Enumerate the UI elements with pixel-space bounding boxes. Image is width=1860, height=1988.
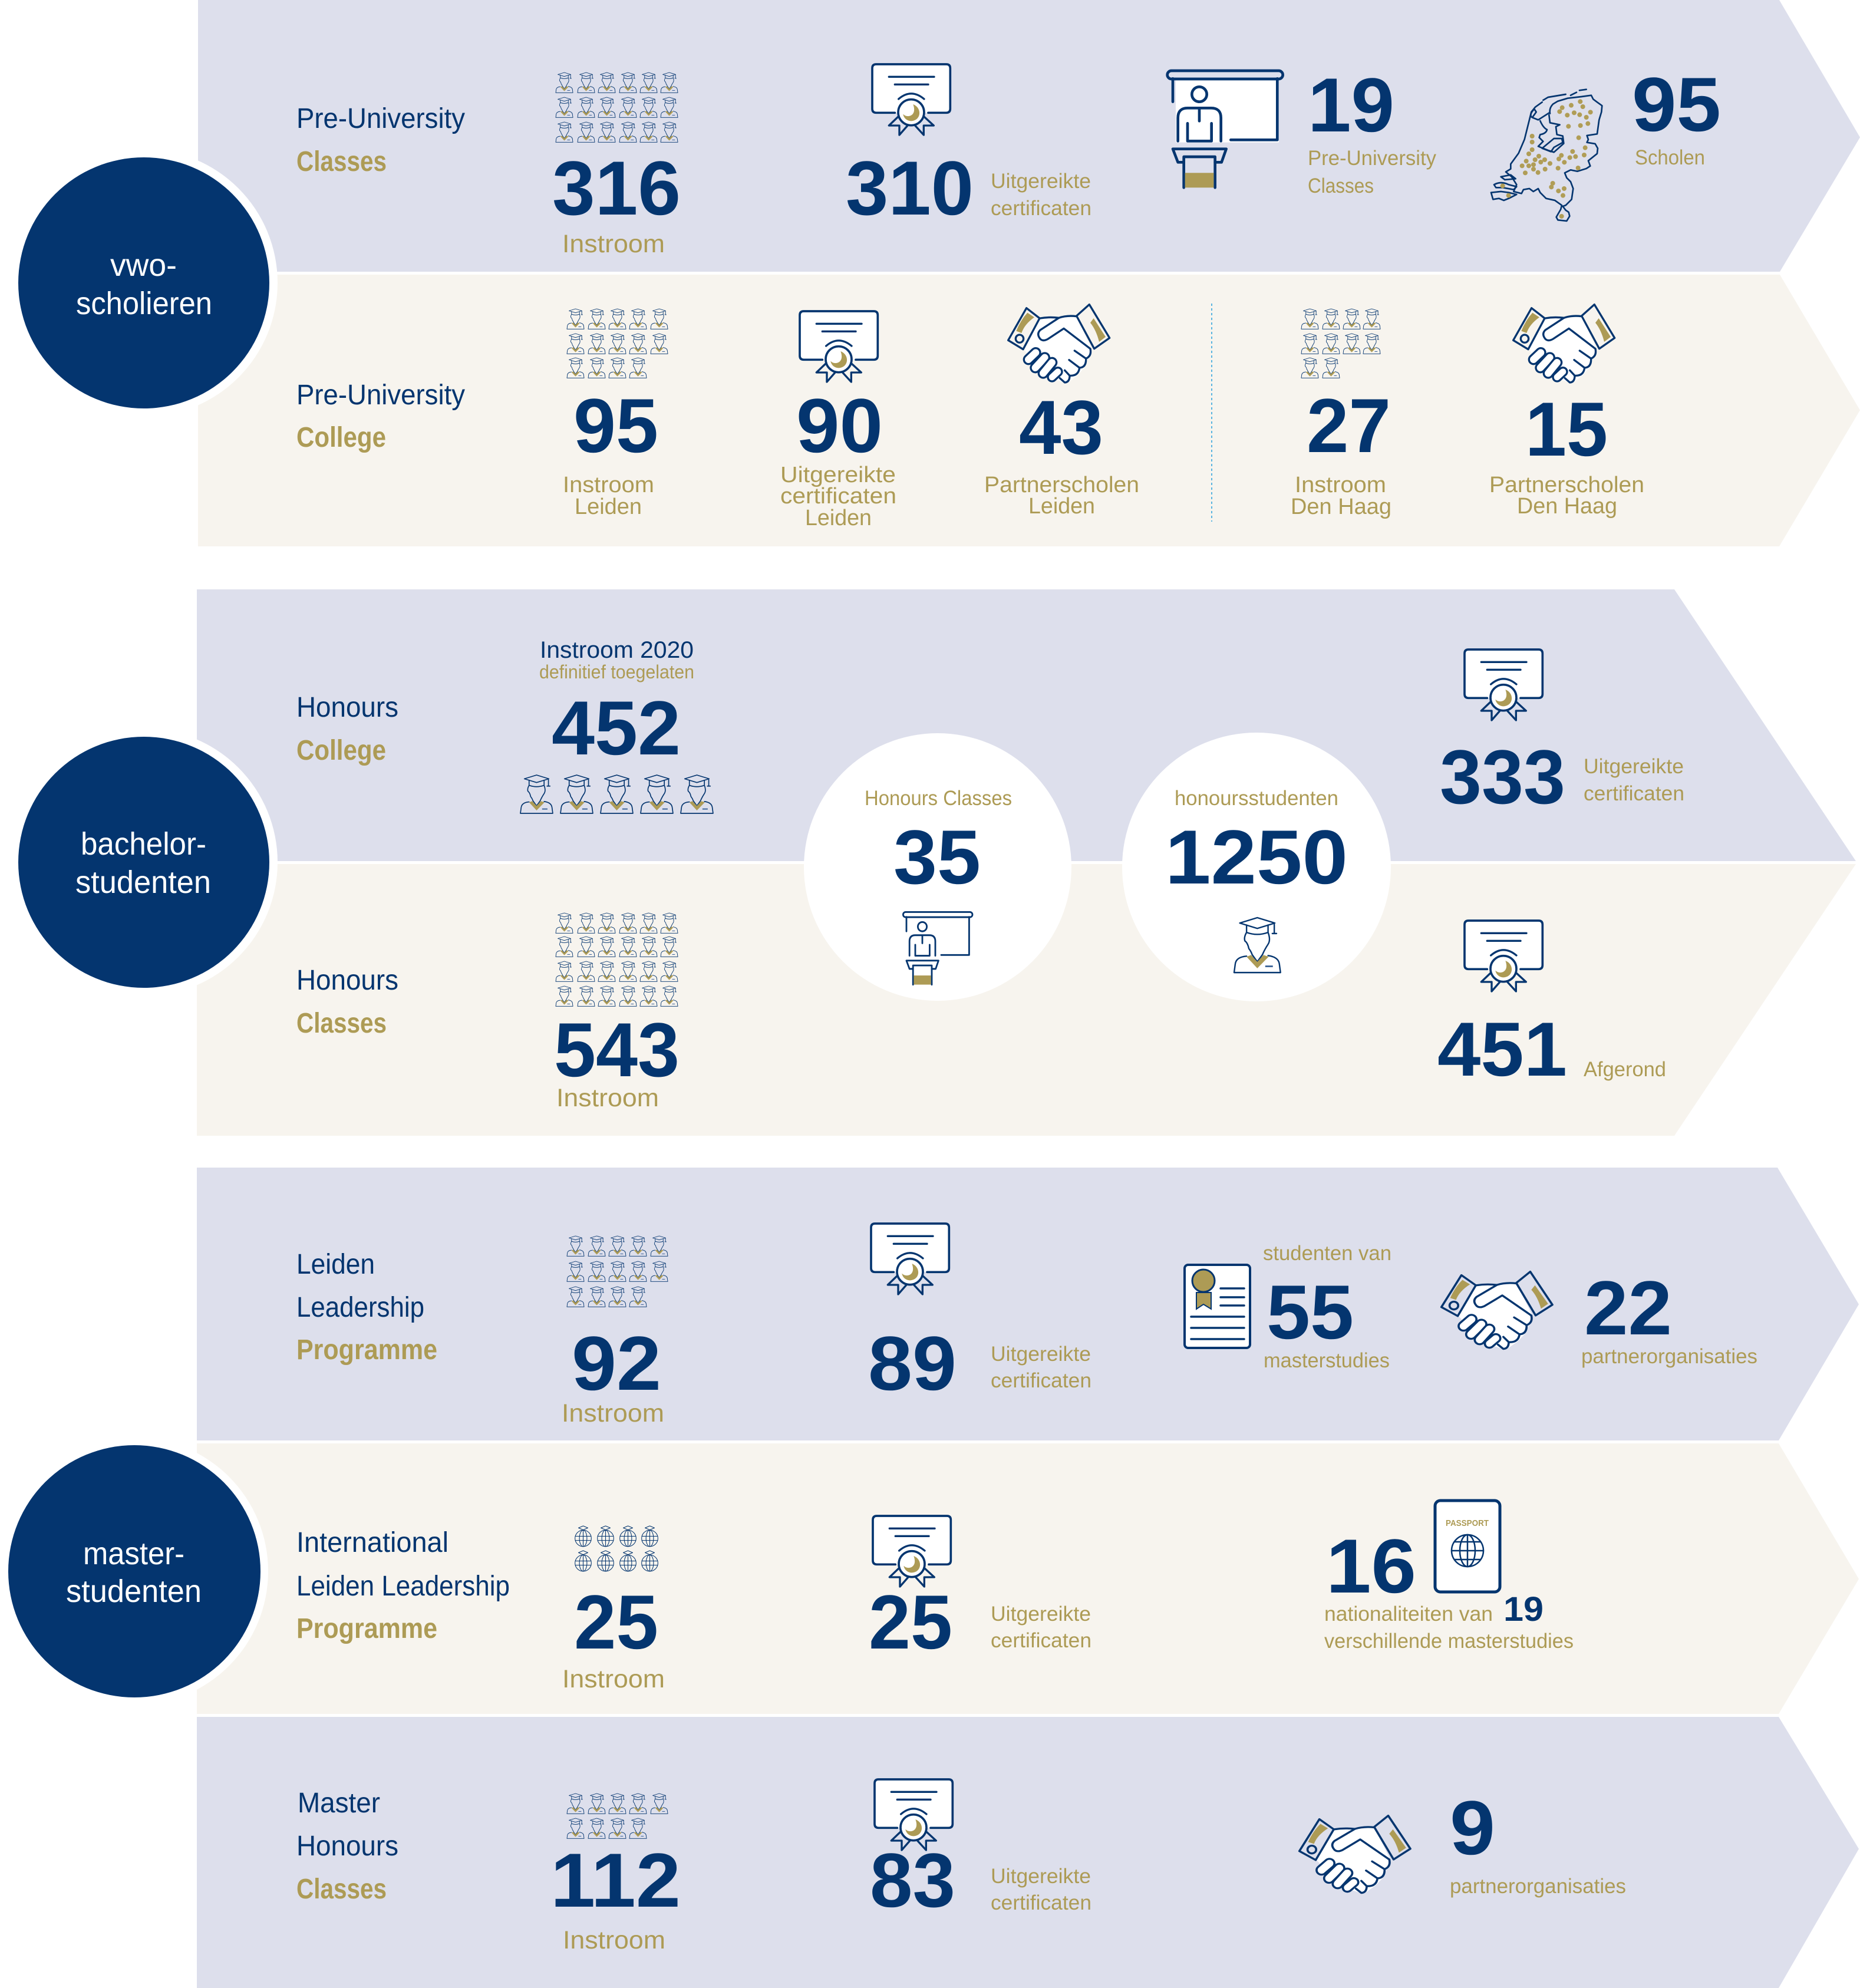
stat: 9 partnerorganisaties: 9 — [1450, 1785, 1495, 1871]
student icons: 316 — [556, 72, 678, 142]
stat: 16 nationaliteiten van 19 verschillende masterstudies: verschillende masterstudies — [1324, 1630, 1574, 1653]
stat: 19 Pre-University Classes: 19 — [1308, 62, 1394, 148]
circle: vwo-scholieren — [10, 149, 278, 417]
callout: 1250 honoursstudenten — [1122, 733, 1391, 1001]
stat: 16 nationaliteiten van 19 verschillende masterstudies: 16 — [1326, 1523, 1416, 1609]
stat: 89 certificaten: 89 — [868, 1320, 957, 1406]
stat: 316 Instroom: Instroom — [562, 230, 665, 258]
heading: Pre-University Classes — [296, 103, 465, 177]
stat: 92 Instroom: Instroom — [562, 1399, 664, 1427]
stat: 89 certificaten: certificaten — [991, 1369, 1091, 1392]
stat: Instroom 2020 452: 452 — [552, 685, 681, 771]
icon: certificate — [1465, 921, 1542, 991]
callout: 35 Honours Classes: Honours Classes — [865, 787, 1012, 810]
student icons: 112 — [567, 1794, 668, 1838]
stat: 90 certificaten Leiden: Leiden — [805, 506, 872, 530]
stat: 92 Instroom — [562, 1320, 664, 1427]
icon: certificate — [873, 1516, 951, 1587]
stat: 16 nationaliteiten van 19 verschillende masterstudies: 19 — [1503, 1590, 1544, 1628]
panel: Pre-University College — [198, 275, 1860, 546]
panel: Honours Classes — [197, 864, 1856, 1136]
stat: 95 Instroom Leiden: Instroom — [563, 473, 654, 497]
heading: Honours Classes: Classes — [296, 1008, 387, 1039]
stat: 90 certificaten Leiden — [780, 383, 896, 530]
stat: Instroom 2020 452: definitief toegelaten — [539, 661, 694, 683]
heading: Honours Classes — [296, 965, 398, 1039]
stat: 22 partnerorganisaties: 22 — [1584, 1265, 1672, 1351]
stat: 89 certificaten — [868, 1320, 1091, 1406]
stat: 25 certificaten — [869, 1579, 1091, 1665]
stat: 22 partnerorganisaties: partnerorganisaties — [1581, 1345, 1757, 1368]
stat: 451 Afgerond: 451 — [1437, 1006, 1567, 1092]
student icons: 92 — [567, 1236, 668, 1307]
stat: 25 Instroom: Instroom — [562, 1665, 665, 1693]
heading: Honours College: Honours — [296, 692, 398, 723]
callout: 1250 honoursstudenten: honoursstudenten — [1175, 787, 1338, 810]
stat: studenten van 55 masterstudies: masterstudies — [1264, 1349, 1390, 1372]
circle: masterstudenten: studenten — [66, 1574, 202, 1609]
heading: Honours Classes: Honours — [296, 965, 398, 996]
stat: 25 Instroom: 25 — [574, 1579, 658, 1665]
stat: 43 Partnerscholen Leiden: 43 — [1019, 384, 1103, 470]
stat: 83 certificaten: certificaten — [991, 1891, 1091, 1914]
stat: 333 certificaten — [1440, 734, 1684, 820]
stat: 543 Instroom: 543 — [554, 1007, 680, 1093]
circle: vwo-scholieren: scholieren — [76, 286, 212, 321]
stat: 83 certificaten: Uitgereikte — [991, 1865, 1091, 1888]
stat: studenten van 55 masterstudies — [1263, 1242, 1391, 1372]
stat: 92 Instroom: 92 — [572, 1320, 661, 1406]
stat: 27 Instroom Den Haag: Instroom — [1295, 473, 1386, 497]
stat: 83 certificaten: 83 — [870, 1837, 955, 1923]
student icons: 452 — [520, 775, 713, 813]
icon: passport — [1435, 1501, 1500, 1592]
icon: passport: PASSPORT — [1446, 1518, 1489, 1528]
icon: map of the Netherlands — [1491, 90, 1602, 221]
heading: International Leiden Leadership Programme: International — [296, 1527, 448, 1558]
stat: 112 Instroom — [550, 1837, 681, 1954]
stat: 25 certificaten: certificaten — [991, 1629, 1091, 1652]
icon: handshake — [1008, 305, 1110, 383]
stat: 19 Pre-University Classes: Classes — [1308, 174, 1374, 197]
stat: 16 nationaliteiten van 19 verschillende masterstudies: nationaliteiten van — [1324, 1603, 1493, 1626]
panel: International Leiden Leadership Programme — [197, 1443, 1859, 1714]
panel: Leiden Leadership Programme — [197, 1168, 1859, 1440]
stat: 333 certificaten: 333 — [1440, 734, 1565, 820]
stat: 543 Instroom: Instroom — [556, 1084, 659, 1112]
heading: Honours College: College — [296, 735, 386, 766]
heading: Pre-University College: Pre-University — [296, 380, 465, 411]
panel: Pre-University Classes — [198, 0, 1860, 272]
icon: certificate — [1465, 650, 1542, 720]
callout: 35 Honours Classes — [804, 733, 1071, 1001]
heading: Pre-University College: College — [296, 422, 386, 453]
stat: 316 Instroom: 316 — [552, 145, 681, 231]
icon: certificate — [871, 1224, 949, 1294]
callout: 1250 honoursstudenten: 1250 — [1165, 814, 1348, 900]
circle: bachelorstudenten — [10, 728, 278, 996]
stat: 95 Scholen: 95 — [1632, 61, 1721, 147]
stat: 112 Instroom: 112 — [550, 1837, 681, 1923]
stat: 95 Instroom Leiden: 95 — [573, 383, 658, 469]
heading: International Leiden Leadership Programme: Leiden Leadership — [296, 1571, 510, 1602]
stat: 27 Instroom Den Haag: Den Haag — [1291, 494, 1391, 519]
stat: 15 Partnerscholen Den Haag: Den Haag — [1517, 494, 1617, 519]
stat: 333 certificaten: certificaten — [1584, 782, 1684, 805]
panel: Master Honours Classes — [197, 1717, 1859, 1988]
heading: Leiden Leadership Programme: Leiden — [296, 1249, 375, 1280]
heading: Pre-University College — [296, 380, 465, 453]
stat: 95 Instroom Leiden — [563, 383, 658, 519]
stat: 310 certificaten: 310 — [846, 145, 974, 231]
stat: 22 partnerorganisaties — [1581, 1265, 1757, 1368]
heading: Leiden Leadership Programme: Programme — [296, 1334, 437, 1366]
circle: masterstudenten: master- — [83, 1536, 184, 1571]
icon: certificate — [800, 311, 878, 382]
icon: diploma — [1185, 1265, 1250, 1348]
stat: 43 Partnerscholen Leiden: Leiden — [1028, 494, 1095, 519]
stat: 90 certificaten Leiden: 90 — [796, 383, 883, 469]
stat: 25 certificaten: 25 — [869, 1579, 952, 1665]
stat: 310 certificaten — [846, 145, 1091, 231]
stat: 90 certificaten Leiden: Uitgereikte — [780, 463, 896, 487]
stat: 310 certificaten: certificaten — [991, 197, 1091, 220]
stat: 25 certificaten: Uitgereikte — [991, 1603, 1091, 1626]
circle: vwo-scholieren: vwo- — [110, 248, 177, 283]
heading: Leiden Leadership Programme — [296, 1249, 437, 1366]
heading: Master Honours Classes: Honours — [296, 1831, 398, 1862]
heading: International Leiden Leadership Programme — [296, 1527, 510, 1644]
callout: 35 Honours Classes: 35 — [893, 814, 981, 900]
stat: studenten van 55 masterstudies: 55 — [1267, 1269, 1354, 1355]
heading: Leiden Leadership Programme: Leadership — [296, 1292, 424, 1323]
icon: certificate — [872, 64, 950, 135]
icon: presenter — [1168, 71, 1283, 187]
stat: Instroom 2020 452: Instroom 2020 — [540, 637, 694, 663]
stat: 19 Pre-University Classes: Pre-University — [1308, 147, 1436, 170]
stat: 310 certificaten: Uitgereikte — [991, 170, 1091, 193]
stat: 83 certificaten — [870, 1837, 1091, 1923]
stat: 333 certificaten: Uitgereikte — [1584, 755, 1684, 778]
student icons: 27 — [1301, 309, 1380, 378]
stat: 27 Instroom Den Haag — [1291, 383, 1391, 519]
stat: 112 Instroom: Instroom — [563, 1926, 665, 1954]
heading: Master Honours Classes: Classes — [296, 1874, 387, 1905]
heading: Honours College — [296, 692, 398, 766]
stat: 9 partnerorganisaties: partnerorganisaties — [1450, 1875, 1626, 1898]
stat: 16 nationaliteiten van 19 verschillende masterstudies — [1324, 1523, 1574, 1653]
stat: 15 Partnerscholen Den Haag — [1489, 386, 1644, 519]
stat: 451 Afgerond — [1437, 1006, 1666, 1092]
stat: 90 certificaten Leiden: certificaten — [780, 484, 896, 509]
heading: Master Honours Classes: Master — [298, 1788, 380, 1819]
stat: 15 Partnerscholen Den Haag: Partnerscholen — [1489, 473, 1644, 497]
stat: 9 partnerorganisaties — [1450, 1785, 1626, 1898]
icon: handshake — [1513, 305, 1615, 383]
icon: certificate — [875, 1779, 952, 1850]
stat: 19 Pre-University Classes — [1308, 62, 1436, 197]
stat: studenten van 55 masterstudies: studenten van — [1263, 1242, 1391, 1265]
stat: 43 Partnerscholen Leiden — [984, 384, 1139, 519]
circle: bachelorstudenten: bachelor- — [81, 826, 206, 862]
heading: Pre-University Classes: Classes — [296, 146, 387, 177]
stat: 27 Instroom Den Haag: 27 — [1307, 383, 1391, 469]
stat: 89 certificaten: Uitgereikte — [991, 1343, 1091, 1366]
heading: International Leiden Leadership Programme: Programme — [296, 1613, 437, 1644]
globe graduate icons: 25 — [575, 1526, 658, 1571]
stat: 451 Afgerond: Afgerond — [1584, 1058, 1666, 1081]
icon: handshake — [1442, 1272, 1552, 1349]
stat: 43 Partnerscholen Leiden: Partnerscholen — [984, 473, 1139, 497]
stat: 15 Partnerscholen Den Haag: 15 — [1525, 386, 1608, 472]
panel: Honours College — [197, 589, 1856, 861]
stat: 25 Instroom — [562, 1579, 665, 1693]
circle: masterstudenten — [1, 1438, 268, 1705]
stat: Instroom 2020 452 — [539, 637, 694, 771]
heading: Master Honours Classes — [296, 1788, 398, 1905]
heading: Pre-University Classes: Pre-University — [296, 103, 465, 134]
stat: 95 Scholen: Scholen — [1635, 146, 1705, 169]
stat: 95 Instroom Leiden: Leiden — [575, 494, 642, 519]
student icons: 95 — [567, 309, 668, 378]
student icons: 543 — [556, 913, 678, 1006]
circle: bachelorstudenten: studenten — [75, 865, 211, 900]
icon: handshake — [1300, 1816, 1410, 1893]
